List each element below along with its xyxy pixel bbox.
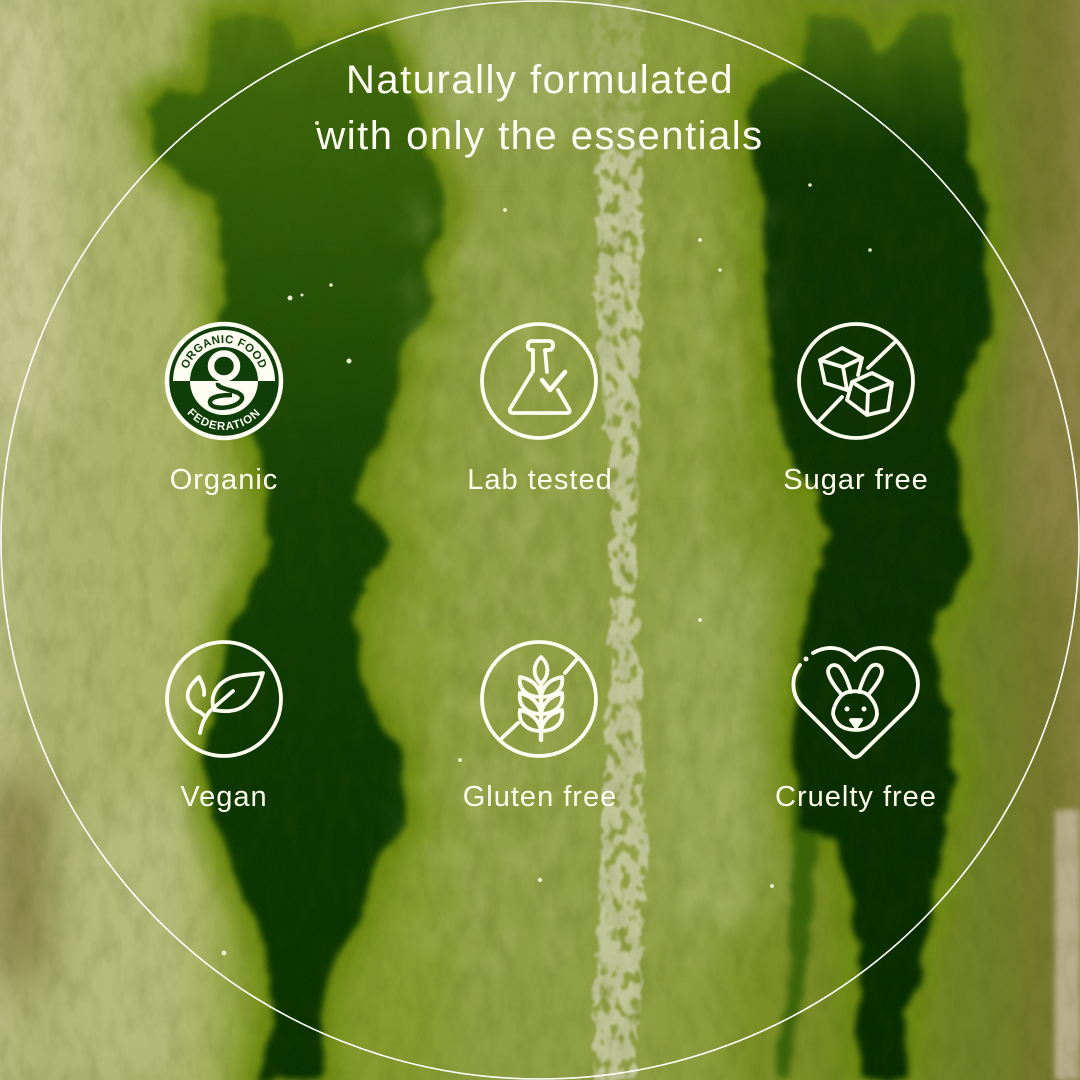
icon: organic food federation — [164, 322, 284, 440]
dark streak secondary strand — [776, 800, 825, 1075]
icon: gluten free wheat — [480, 640, 598, 758]
icon: organic food federation: FEDERATION — [187, 408, 260, 430]
dark streak left — [145, 15, 450, 1080]
label: organic: Organic — [170, 464, 278, 496]
icon: vegan leaf — [165, 640, 283, 758]
icon: cruelty free rabbit heart — [791, 646, 920, 759]
title — [316, 58, 764, 158]
pale vertical stripe — [590, 0, 648, 1080]
dark streak right — [746, 15, 990, 1080]
halo around dark streaks — [145, 15, 990, 1080]
icon: lab flask — [480, 322, 598, 440]
icon: sugar free — [797, 322, 915, 440]
label: vegan: Vegan — [180, 781, 268, 813]
label: sugar free: Sugar free — [783, 464, 929, 496]
title: Naturally formulated — [346, 58, 734, 102]
pale clouds — [410, 200, 765, 980]
label: lab tested: Lab tested — [467, 464, 613, 496]
label: gluten free: Gluten free — [463, 781, 617, 813]
title: with only the essentials — [316, 114, 764, 158]
label: cruelty free: Cruelty free — [775, 781, 937, 813]
icon: organic food federation: ORGANIC FOOD — [182, 335, 266, 368]
